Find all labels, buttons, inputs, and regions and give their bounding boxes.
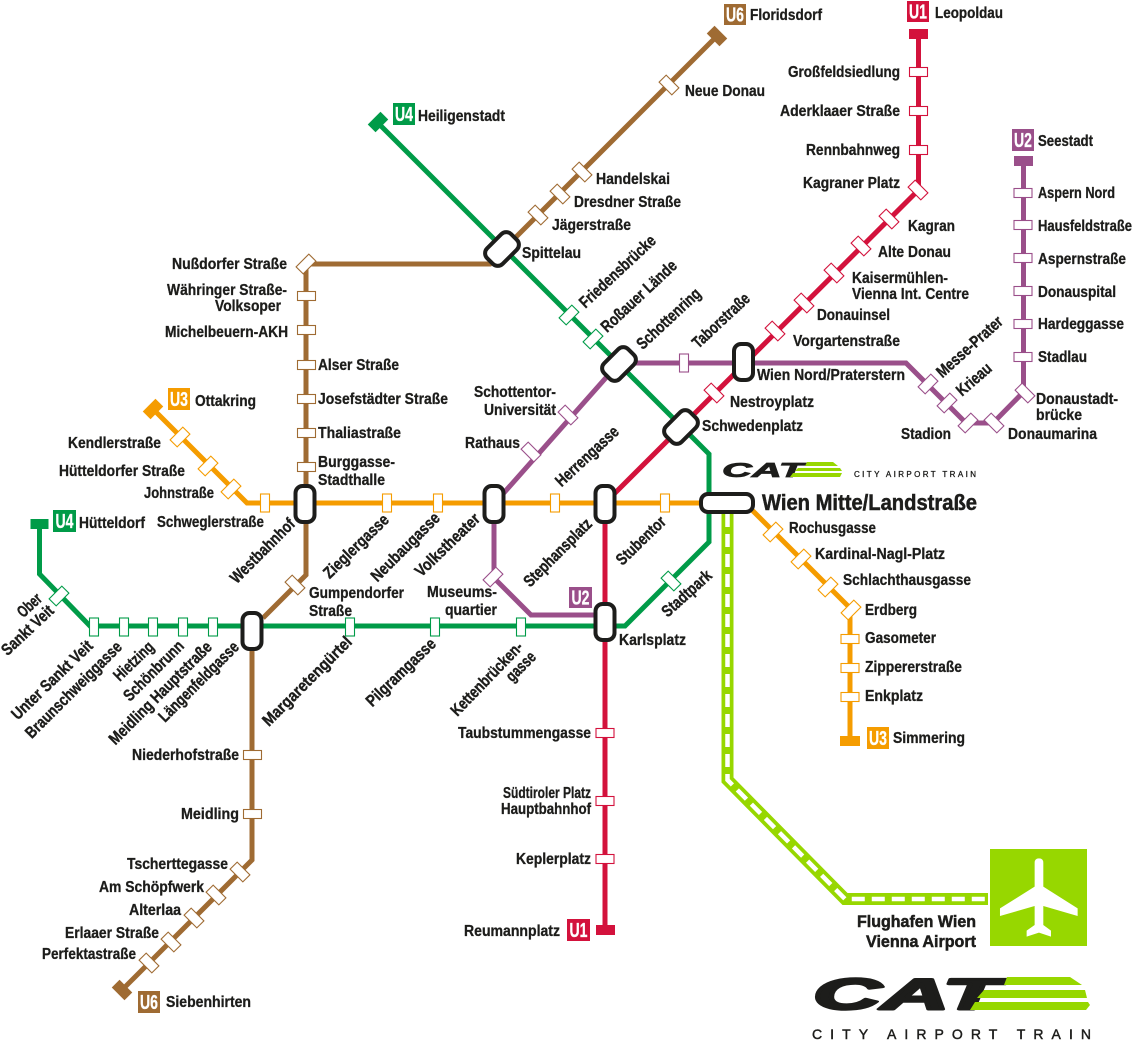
station labels: horizontal: Keplerplatz — [516, 851, 591, 868]
station labels: horizontal: Donauspital — [1038, 284, 1116, 301]
badge: U4 Hütteldorf — [53, 510, 146, 533]
station labels: horizontal: Michelbeuern-AKH — [165, 324, 288, 341]
station labels: rotated: Hietzing — [110, 638, 158, 685]
station labels: horizontal: Kagraner Platz — [803, 175, 900, 192]
badge: U3 Simmering — [867, 727, 965, 750]
badge: U2 Seestadt: U2 — [1014, 130, 1032, 152]
stations: U6 — [139, 75, 679, 973]
icon: airplane panel — [990, 849, 1087, 946]
airport label: Vienna Airport — [866, 932, 976, 951]
badge: U1 Leopoldau — [907, 1, 1003, 24]
station labels: horizontal: Nußdorfer Straße — [172, 256, 287, 273]
station labels: horizontal: Wien Nord/Praterstern — [757, 367, 905, 384]
small logo tagline: CITY AIRPORT TRAIN — [854, 470, 976, 479]
badge: U6 Siebenhirten — [138, 991, 251, 1014]
badge: U4 Hütteldorf: Hütteldorf — [79, 515, 146, 532]
station labels: horizontal: Schwedenplatz — [702, 418, 803, 435]
station labels: horizontal: Neue Donau — [685, 83, 765, 100]
station labels: horizontal: Straße — [309, 603, 352, 620]
station labels: horizontal: Handelskai — [596, 171, 670, 188]
station labels: horizontal: Nestroyplatz — [730, 394, 814, 411]
station labels: horizontal: Burggasse- — [318, 454, 395, 471]
station labels: rotated: Messe-Prater — [933, 312, 1007, 382]
route: U6 brown line — [112, 26, 727, 1000]
stations: U1 — [596, 68, 928, 864]
station labels: horizontal: Meidling — [181, 806, 239, 823]
station labels: horizontal: Josefstädter Straße — [318, 391, 448, 408]
station labels: rotated: Längenfeldgasse — [155, 638, 243, 726]
badge: U1 Leopoldau: U1 — [909, 2, 927, 24]
station labels: rotated: Taborstraße — [689, 290, 754, 352]
station labels: horizontal: Schlachthausgasse — [843, 572, 971, 589]
station labels: horizontal: Alte Donau — [878, 244, 951, 261]
badge: U3 Ottakring — [168, 388, 256, 411]
stations: U4 — [49, 305, 681, 636]
badge: U6 Floridsdorf — [724, 4, 823, 26]
large CAT logo: CAT — [813, 970, 1007, 1019]
station labels: horizontal: Universität — [484, 402, 557, 419]
station labels: horizontal: Gumpendorfer — [309, 585, 404, 602]
station labels: rotated: Braunschweiggasse — [22, 638, 126, 742]
badge: U4 Heiligenstadt: U4 — [395, 104, 414, 126]
badge: U1 Reumannplatz: U1 — [570, 920, 588, 942]
station labels: horizontal: Perfektastraße — [42, 946, 136, 963]
station labels: rotated: Friedensbrücke — [576, 232, 660, 312]
station labels: horizontal: Rennbahnweg — [806, 142, 900, 159]
badge: U3 Simmering: U3 — [869, 728, 887, 750]
station labels: horizontal: Am Schöpfwerk — [99, 879, 204, 896]
station labels: horizontal: Spittelau — [522, 245, 581, 262]
station labels: horizontal: Aspern Nord — [1038, 185, 1115, 202]
station labels: horizontal: Taubstummengasse — [458, 725, 591, 742]
badge: U2 Seestadt: Seestadt — [1038, 133, 1094, 150]
station labels: horizontal: Dresdner Straße — [574, 194, 681, 211]
station labels: rotated: Unter Sankt Veit — [8, 637, 97, 724]
station labels: horizontal: brücke — [1036, 407, 1082, 424]
station labels: horizontal: Rochusgasse — [789, 520, 876, 537]
station labels: horizontal: Hütteldorfer Straße — [59, 463, 185, 480]
route: U3 orange line — [143, 399, 860, 746]
station labels: horizontal: Enkplatz — [865, 688, 923, 705]
station labels: rotated: Schottenring — [633, 285, 705, 353]
station labels: horizontal: Stadthalle — [318, 472, 385, 489]
station labels: rotated: Meidling Hauptstraße — [106, 638, 216, 748]
station labels: rotated: Volkstheater — [412, 510, 484, 581]
stations: U3 — [170, 427, 861, 702]
stations: U2 — [483, 188, 1035, 587]
station labels: horizontal: Vorgartenstraße — [793, 333, 900, 350]
badge: U3 Simmering: Simmering — [893, 730, 965, 747]
station labels: rotated: Ober — [14, 589, 46, 621]
badge: U4 Heiligenstadt: Heiligenstadt — [418, 108, 506, 125]
station labels: rotated: Zieglergasse — [320, 511, 393, 582]
station labels: horizontal: Schweglerstraße — [157, 514, 264, 531]
station labels: horizontal: Stadlau — [1038, 349, 1087, 366]
station labels: rotated: Margaretengürtel — [259, 633, 356, 730]
badge: U6 Floridsdorf: U6 — [726, 4, 744, 26]
airport label: Flughafen Wien — [857, 912, 976, 931]
station labels: horizontal: Kagran — [908, 218, 955, 235]
badge: U1 Leopoldau: Leopoldau — [935, 5, 1003, 22]
route: U1 red line — [596, 29, 928, 935]
station labels: horizontal: Museums- — [427, 584, 497, 601]
badge: U2 Seestadt — [1012, 129, 1094, 152]
station labels: horizontal: Niederhofstraße — [132, 747, 239, 764]
station labels: horizontal: Südtiroler Platz — [503, 785, 591, 802]
main station label: Wien Mitte/Landstraße: Wien Mitte/Landstraße — [762, 490, 977, 515]
badge: U2 at Karlsplatz: U2 — [572, 588, 590, 610]
station labels: horizontal: Volksoper — [215, 298, 281, 315]
station labels: horizontal: Alser Straße — [318, 357, 399, 374]
station labels: horizontal: Thaliastraße — [318, 425, 401, 442]
station labels: horizontal: Aderklaaer Straße — [780, 103, 900, 120]
station labels: horizontal: Erlaaer Straße — [65, 925, 159, 942]
route: U2 purple line — [494, 156, 1033, 615]
station labels: rotated: Schönbrunn — [120, 637, 188, 705]
station labels: rotated: Stephansplatz — [520, 515, 596, 591]
station labels: horizontal: Jägerstraße — [552, 217, 631, 234]
station labels: horizontal: Rathaus — [465, 435, 520, 452]
station labels: horizontal: Alterlaa — [129, 902, 181, 919]
badge: U6 Siebenhirten: U6 — [140, 992, 158, 1014]
station labels: rotated — [0, 232, 1007, 748]
airport label — [857, 912, 976, 951]
station labels: horizontal: Tscherttegasse — [127, 856, 228, 873]
station labels: horizontal: Donaustadt- — [1036, 391, 1118, 408]
station labels: rotated: Kettenbrücken- — [447, 638, 527, 720]
station labels: rotated: Pilgramgasse — [363, 635, 440, 710]
route: U4 green line — [30, 112, 709, 626]
station labels: rotated: Stadtpark — [658, 566, 716, 621]
badge: U1 Reumannplatz: Reumannplatz — [464, 923, 560, 940]
badge: U4 Heiligenstadt — [393, 103, 506, 126]
station labels: horizontal: Erdberg — [865, 602, 917, 619]
station labels: horizontal: Donauinsel — [817, 307, 890, 324]
station labels: rotated: Westbahnhof — [227, 515, 299, 587]
station labels: horizontal: Hauptbahnhof — [501, 801, 592, 818]
small CAT logo — [722, 460, 842, 482]
station labels: rotated: Stubentor — [613, 513, 670, 569]
badge: U6 Floridsdorf: Floridsdorf — [750, 7, 823, 24]
badge: U1 Reumannplatz — [464, 919, 590, 942]
station labels: horizontal: Großfeldsiedlung — [788, 64, 900, 81]
station labels: horizontal: Schottentor- — [474, 384, 556, 401]
station labels: horizontal: Donaumarina — [1008, 426, 1097, 443]
station labels: horizontal: quartier — [445, 602, 497, 619]
station labels: horizontal: Kardinal-Nagl-Platz — [815, 546, 945, 563]
station labels: horizontal: Währinger Straße- — [167, 282, 287, 299]
station labels: horizontal: Kendlerstraße — [68, 435, 161, 452]
small CAT logo: CAT — [722, 460, 808, 482]
station labels: rotated: gasse — [502, 648, 540, 686]
interchange stations — [242, 229, 753, 649]
station labels: rotated: Krieau — [953, 359, 996, 400]
station labels: rotated: Neubaugasse — [367, 509, 444, 585]
station labels: rotated: Herrengasse — [552, 423, 623, 490]
station labels: horizontal: Karlsplatz — [619, 632, 686, 649]
station labels: rotated: Roßauer Lände — [598, 257, 681, 336]
route: City Airport Train line — [728, 510, 988, 899]
station labels: horizontal: Gasometer — [865, 630, 936, 647]
badge: U4 Hütteldorf: U4 — [56, 511, 74, 533]
badge: U3 Ottakring: Ottakring — [195, 393, 256, 410]
station labels: horizontal: Kaisermühlen- — [852, 270, 948, 287]
badge: U3 Ottakring: U3 — [170, 389, 188, 411]
station labels: horizontal: Stadion — [901, 426, 951, 443]
station labels: horizontal: Johnstraße — [144, 485, 214, 502]
station labels: rotated: Sankt Veit — [0, 601, 58, 659]
station labels: horizontal: Zippererstraße — [865, 659, 962, 676]
station labels: horizontal: Vienna Int. Centre — [852, 286, 969, 303]
large CAT logo — [813, 970, 1090, 1019]
badge: U6 Siebenhirten: Siebenhirten — [166, 994, 251, 1011]
